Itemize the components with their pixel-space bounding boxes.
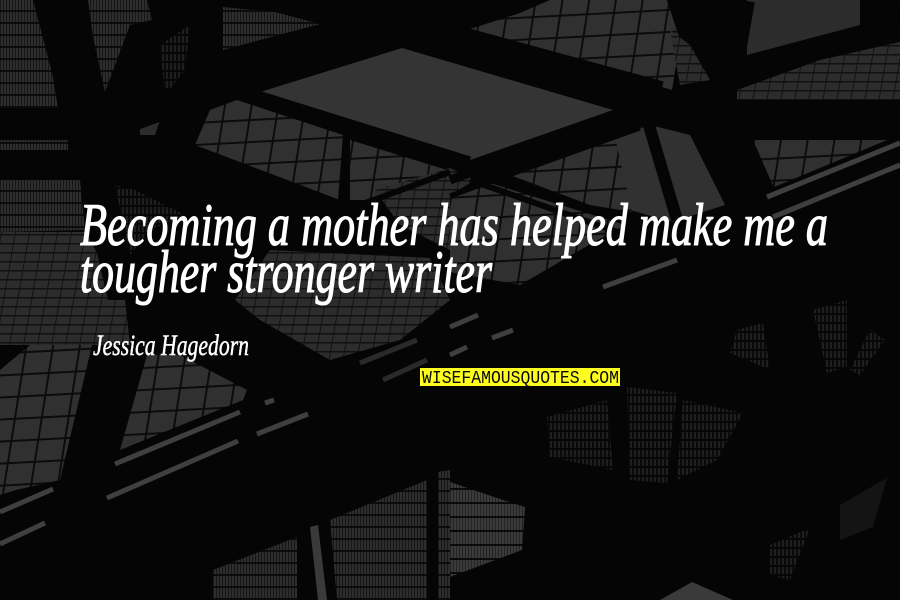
bottom left grid panels: [0, 345, 247, 495]
mesh panels top left: [0, 0, 320, 345]
beams over the panels: [0, 0, 900, 240]
quote line 2: tougher stronger writer: [80, 239, 492, 305]
large central panel: [257, 48, 613, 160]
bottom mesh panels: [213, 470, 887, 600]
upper right panels: [450, 0, 900, 285]
watermark badge: WISEFAMOUSQUOTES.COM: [422, 369, 619, 389]
main left column: [33, 0, 132, 300]
light handrail bands: [0, 143, 900, 544]
grid panels below the central panel: [140, 100, 475, 250]
author name: Jessica Hagedorn: [93, 329, 249, 362]
quote text: [80, 192, 828, 305]
dim right-hand mesh patches: [547, 300, 885, 483]
middle mesh behind the second line: [235, 250, 450, 360]
